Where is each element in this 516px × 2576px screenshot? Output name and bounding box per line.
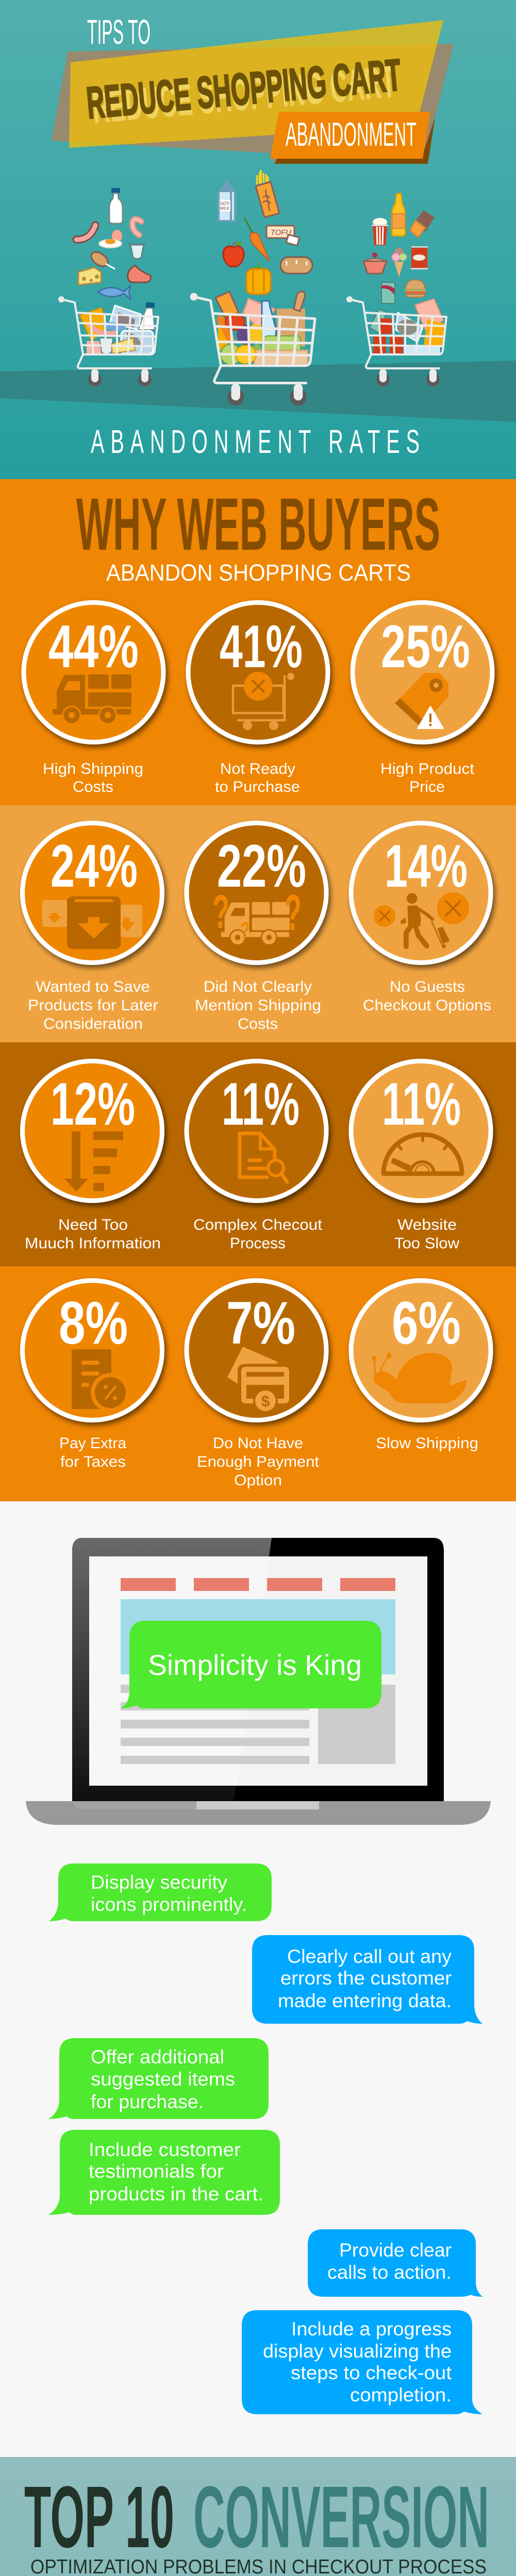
- bubble: call out errors: errors the customer: [280, 1968, 452, 1989]
- stat: 7%: [187, 1281, 326, 1489]
- stat: 22%: Did Not Clearly: [204, 978, 312, 995]
- stat: 22%: Costs: [238, 1015, 278, 1032]
- stat: 6%: Slow Shipping: [376, 1435, 478, 1452]
- stat: 14%: No Guests: [390, 978, 465, 995]
- stat: 7%: $: [261, 1393, 270, 1410]
- stat: 22%: Mention Shipping: [195, 997, 321, 1014]
- bubble: progress display: [242, 2310, 482, 2414]
- stat: 44%: High Shipping: [43, 760, 143, 777]
- stat: 11% slow: Too Slow: [394, 1235, 459, 1252]
- panel: hero: TIPS TO: [87, 13, 151, 52]
- stat: 22%: ?: [240, 917, 249, 944]
- bubble: call out errors: made entering data.: [278, 1990, 452, 2011]
- bubble: call out errors: Clearly call out any: [287, 1946, 452, 1967]
- bubble: security icons: icons prominently.: [91, 1894, 247, 1915]
- foods above centre cart: MILK: [220, 206, 230, 211]
- abandonment rates heading: ABANDONMENT RATES: [91, 424, 420, 460]
- bubble: progress display: Include a progress: [291, 2318, 452, 2340]
- foods above centre cart: [218, 170, 312, 294]
- bubble: calls to action: calls to action.: [327, 2262, 452, 2283]
- stat: 24%: [23, 823, 162, 1032]
- stat: 11% slow: Website: [397, 1216, 457, 1233]
- stat: 41%: to Purchase: [215, 778, 300, 795]
- stat: 44%: Costs: [73, 778, 113, 795]
- panel: why web buyers stats: [0, 479, 516, 1501]
- stat: 41%: [188, 603, 328, 795]
- floor band: [0, 361, 516, 422]
- stat: 25%: Price: [409, 778, 445, 795]
- foods above centre cart: SOY: [220, 201, 230, 206]
- heading: [24, 2468, 489, 2566]
- stat: 11% slow: 11%: [382, 1070, 461, 1138]
- foods above left cart: [76, 188, 151, 299]
- stat: 24%: 24%: [51, 832, 138, 900]
- stat: 44%: 44%: [48, 613, 139, 680]
- stat: 12%: 12%: [51, 1070, 135, 1138]
- bubble: progress display: completion.: [350, 2384, 452, 2405]
- stat: 22%: ?: [212, 886, 229, 938]
- bubble: testimonials: Include customer: [89, 2139, 241, 2160]
- stat: 7%: Do Not Have: [213, 1435, 303, 1452]
- left shopping cart: [58, 296, 158, 386]
- bubble: testimonials: products in the cart.: [89, 2183, 263, 2205]
- panel: hero: [0, 0, 516, 479]
- stat: 24%: Wanted to Save: [36, 978, 150, 995]
- stat: 22%: ?: [285, 884, 302, 941]
- stat: 22%: [187, 823, 326, 1032]
- stat: 11% slow: [351, 1061, 491, 1252]
- stat: 44%: [24, 603, 163, 795]
- panel: top 10 conversion: [0, 2457, 516, 2576]
- centre cart contents: [215, 292, 308, 365]
- stat: 7%: Option: [234, 1472, 282, 1489]
- bubble: security icons: Display security: [91, 1872, 228, 1893]
- right shopping cart: [346, 296, 446, 386]
- bubble: progress display: steps to check-out: [291, 2362, 452, 2383]
- foods above centre cart: TOFU: [271, 228, 291, 237]
- subheading: ABANDON SHOPPING CARTS: [106, 560, 411, 586]
- stat: 11% complex: [187, 1061, 326, 1252]
- stat: 7%: 7%: [226, 1289, 295, 1357]
- stat: 11% complex: Process: [230, 1235, 286, 1252]
- stat: 25%: 25%: [381, 613, 470, 680]
- stat: 24%: Consideration: [43, 1015, 143, 1032]
- stat: 8%: [23, 1281, 162, 1470]
- bubble: call out errors: [252, 1935, 482, 2024]
- stat: 25%: [353, 603, 492, 795]
- bubble: testimonials: [48, 2130, 280, 2215]
- stat: 14%: [351, 823, 491, 1014]
- left cart contents: [80, 302, 155, 354]
- stat: 41%: 41%: [220, 613, 303, 680]
- stat: 12%: Need Too: [58, 1216, 128, 1233]
- bubble: suggested items: Offer additional: [91, 2046, 224, 2067]
- stat: 24%: Products for Later: [28, 997, 158, 1014]
- bubble: calls to action: Provide clear: [339, 2240, 452, 2261]
- stat: 14%: Checkout Options: [363, 997, 491, 1014]
- bubble: simplicity is king: [121, 1621, 381, 1708]
- stat: 12%: Muuch Information: [25, 1235, 161, 1252]
- bubble: suggested items: [48, 2038, 269, 2119]
- bubble: suggested items: suggested items: [91, 2069, 235, 2090]
- bubble: simplicity is king: Simplicity is King: [148, 1649, 362, 1681]
- bubble: progress display: display visualizing the: [263, 2341, 452, 2362]
- stat: 12%: [23, 1061, 162, 1252]
- stat: 41%: Not Ready: [220, 760, 295, 777]
- stat: 6%: [351, 1281, 491, 1452]
- laptop: [26, 1538, 491, 1825]
- stat: 8%: Pay Extra: [59, 1435, 126, 1452]
- panel: simplicity: [26, 1538, 491, 2414]
- bubble: security icons: [49, 1863, 272, 1921]
- stat: 25%: High Product: [380, 760, 475, 777]
- centre shopping cart: [190, 293, 315, 405]
- stat: 7%: Enough Payment: [197, 1453, 320, 1470]
- stat: 11% complex: 11%: [222, 1070, 299, 1138]
- title banner: [52, 20, 454, 164]
- stat: 14%: 14%: [385, 832, 468, 900]
- bubble: suggested items: for purchase.: [91, 2091, 204, 2112]
- bubble: calls to action: [308, 2229, 482, 2297]
- stat: 6%: 6%: [392, 1289, 461, 1357]
- stat: 22%: 22%: [217, 832, 306, 900]
- heading: TOP 10: [24, 2468, 174, 2566]
- stat: 11% complex: Complex Checout: [193, 1216, 323, 1233]
- stat: 8%: 8%: [59, 1289, 128, 1357]
- bubble: testimonials: testimonials for: [89, 2161, 224, 2182]
- stat: 8%: for Taxes: [60, 1453, 126, 1470]
- right cart contents: [370, 299, 444, 354]
- foods above right cart: [363, 194, 435, 303]
